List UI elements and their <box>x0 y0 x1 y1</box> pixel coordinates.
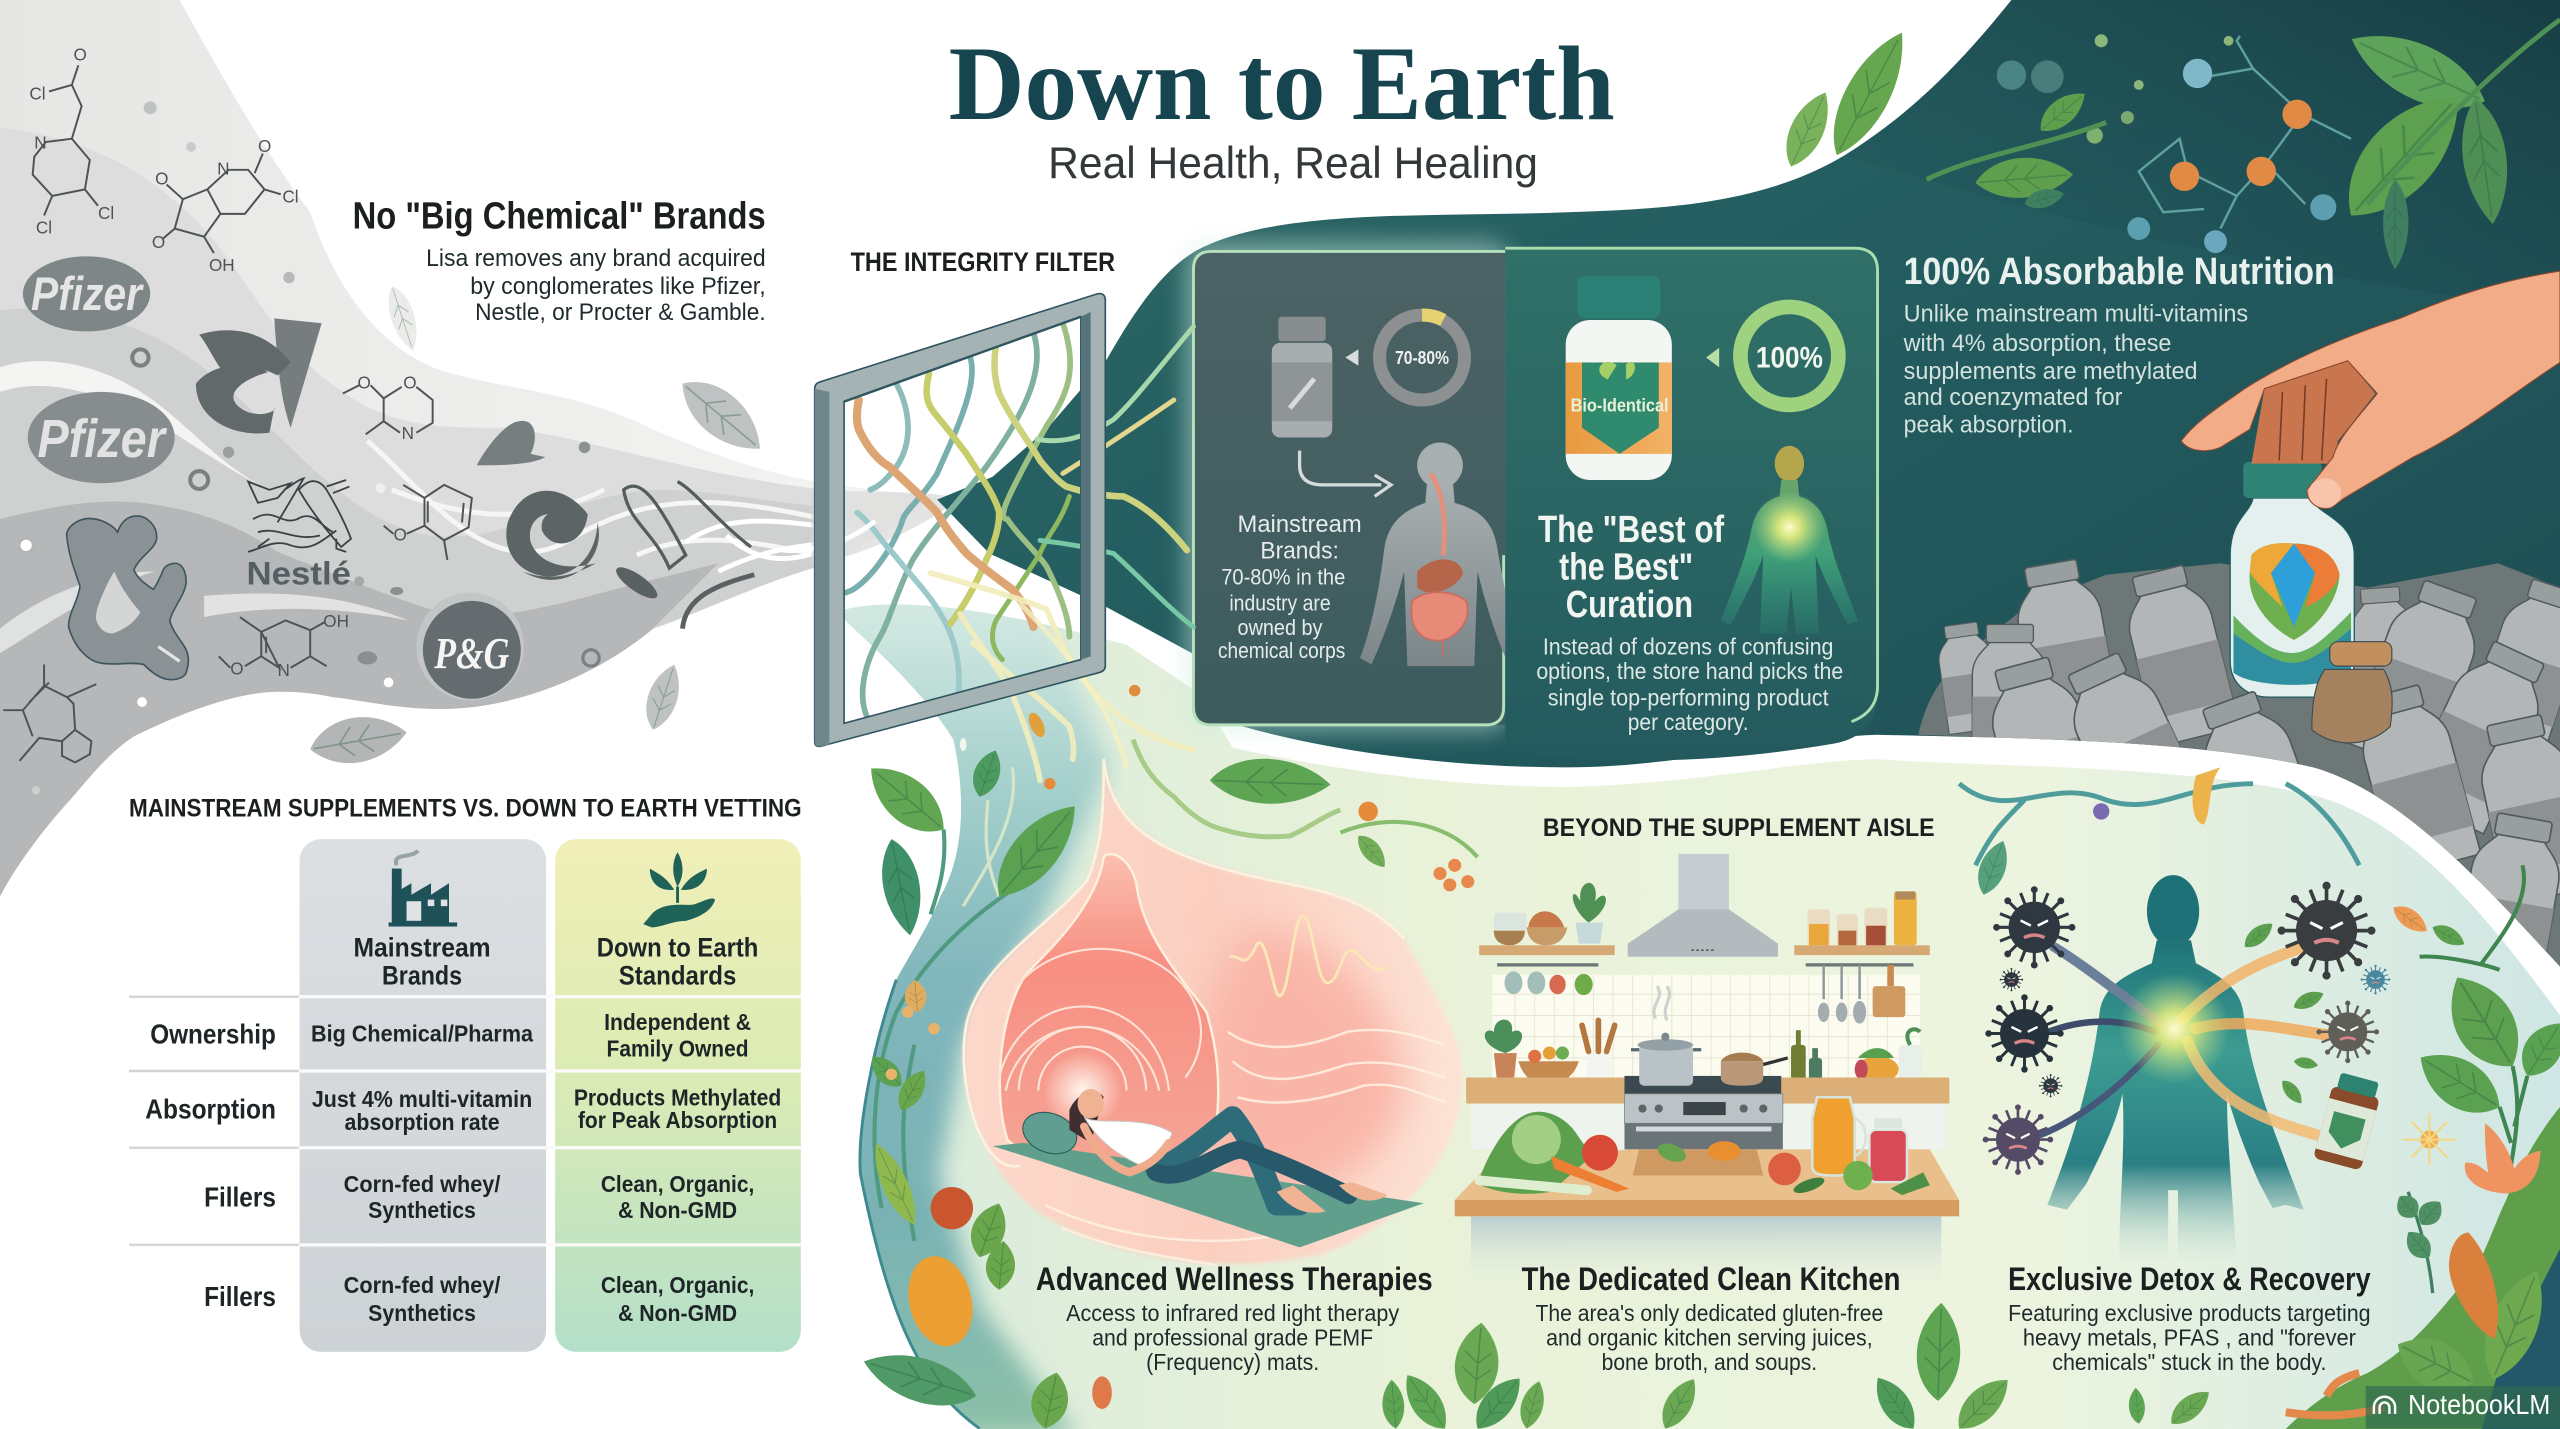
text block: exclusive detox and recovery: Exclusive Detox & Recovery <box>2008 1260 2371 1297</box>
table cells: Clean, Organic, <box>601 1171 754 1197</box>
brand logo: Pfizer ellipse top <box>23 256 150 331</box>
table cells: Independent & <box>604 1009 751 1035</box>
column: down to earth <box>555 839 801 1352</box>
strands <box>784 323 1193 780</box>
row labels: Fillers <box>204 1182 276 1213</box>
glow <box>2119 973 2230 1084</box>
text block: 100% absorbable nutrition: supplements are methylated <box>1904 359 2198 385</box>
right shelf <box>1794 891 1930 1024</box>
island counter <box>1455 1097 1959 1290</box>
molecule atom labels: N <box>217 159 230 179</box>
decorative molecule on dark <box>1997 34 2351 253</box>
frame <box>815 294 1105 746</box>
left shelf <box>1479 883 1615 995</box>
table title: MAINSTREAM SUPPLEMENTS VS. DOWN TO EARTH VETTING <box>129 794 802 822</box>
text block: 100% absorbable nutrition: and coenzymated for <box>1904 385 2123 411</box>
heading: beyond the supplement aisle: BEYOND THE SUPPLEMENT AISLE <box>1543 814 1935 842</box>
table cells: Corn-fed whey/ <box>344 1272 501 1298</box>
molecule atom labels: OH <box>323 611 349 631</box>
text block: advanced wellness therapies <box>1036 1260 1433 1375</box>
row labels: Ownership <box>150 1018 276 1049</box>
subtitle: Real Health, Real Healing <box>1048 139 1538 188</box>
text: mainstream brands note: industry are <box>1229 591 1331 616</box>
text: mainstream brands note: owned by <box>1238 615 1322 640</box>
text: curation note: per category. <box>1628 709 1749 735</box>
icon: bio-identical bottle <box>1566 276 1672 480</box>
text block: no big chemical brands: No "Big Chemical" Brands <box>353 195 766 237</box>
header text: Standards <box>619 960 736 990</box>
text block: exclusive detox and recovery: heavy metals, PFAS , and "forever <box>2023 1324 2356 1350</box>
row labels <box>145 1018 276 1312</box>
text: curation note: options, the store hand picks the <box>1536 658 1843 684</box>
silhouette <box>2047 875 2304 1260</box>
text: mainstream brands note: Mainstream <box>1238 512 1362 538</box>
table cells: & Non-GMD <box>618 1300 737 1326</box>
molecule atom labels: N <box>34 133 47 153</box>
tiled wall <box>1492 975 1920 1079</box>
text block: no big chemical brands: Lisa removes any brand acquired <box>426 246 766 272</box>
table cells: absorption rate <box>344 1109 500 1135</box>
molecule atom labels: Cl <box>282 186 299 206</box>
table cells: Products Methylated <box>574 1084 781 1110</box>
woman on mat <box>993 1089 1424 1247</box>
heading: best of the best: The "Best of <box>1538 508 1724 550</box>
hand picking the bottle <box>2181 271 2560 508</box>
header text <box>353 933 758 990</box>
panel: mainstream brands <box>1193 251 1522 725</box>
pots <box>1631 986 1788 1086</box>
dark teal top right region <box>937 0 2560 967</box>
molecule atom labels: N <box>278 660 290 680</box>
text block: 100% absorbable nutrition: 100% Absorbable Nutrition <box>1904 250 2335 292</box>
column: mainstream <box>300 839 546 1352</box>
counter and stove <box>1466 1076 1949 1149</box>
leaves top right <box>1776 16 2560 269</box>
small leaves <box>2240 917 2326 1107</box>
row labels: Absorption <box>145 1093 276 1124</box>
molecule atom labels: N <box>402 423 414 443</box>
molecule atom labels: O <box>358 373 371 393</box>
brand logo: Pfizer ellipse top: Pfizer <box>31 268 144 321</box>
text block: 100% absorbable nutrition: peak absorption. <box>1904 413 2073 439</box>
back counter plants and utensils <box>1485 1020 1922 1086</box>
text block: no big chemical brands: Nestle, or Procter & Gamble. <box>475 300 766 326</box>
table cells: Synthetics <box>368 1197 476 1223</box>
text block: dedicated clean kitchen: bone broth, and soups. <box>1602 1349 1817 1375</box>
filter frame with strands <box>784 294 1193 780</box>
row labels: Fillers <box>204 1281 276 1312</box>
foreground rubble bottle <box>2202 691 2300 764</box>
icon: grey bottle <box>1272 317 1332 438</box>
brand logo: abstract arrow <box>196 318 322 434</box>
table cells: for Peak Absorption <box>578 1107 777 1133</box>
table cells: Corn-fed whey/ <box>344 1171 501 1197</box>
panel: best of the best <box>1505 248 1878 760</box>
icon: factory <box>389 851 457 927</box>
text block: exclusive detox and recovery: Featuring exclusive products targeting <box>2008 1300 2371 1326</box>
text block: dedicated clean kitchen <box>1522 1260 1900 1375</box>
header text: Brands <box>382 960 462 990</box>
icon: wave signal <box>1229 916 1388 996</box>
row dividers <box>299 997 802 1245</box>
comparison table <box>129 794 802 1352</box>
molecule atom labels: Cl <box>98 203 114 223</box>
NotebookLM watermark <box>2366 1386 2560 1429</box>
table cells: Big Chemical/Pharma <box>311 1021 533 1047</box>
icon: glowing green body <box>1721 446 1858 633</box>
grey chemical flow background <box>0 0 963 896</box>
molecule atom labels: OH <box>209 255 235 275</box>
right foliage <box>2286 865 2560 1429</box>
viruses <box>1983 882 2390 1175</box>
brand logo: Nestle nest and wordmark: Nestlé <box>247 554 351 591</box>
molecule atom labels: Cl <box>29 84 46 104</box>
heading: best of the best: the Best" <box>1559 546 1693 588</box>
header text: Mainstream <box>353 933 491 963</box>
detox side vines <box>1959 767 2359 899</box>
text block: advanced wellness therapies: (Frequency) mats. <box>1146 1349 1319 1375</box>
molecule atom labels: O <box>73 44 87 64</box>
text block: 100% absorbable nutrition <box>1903 250 2335 439</box>
text: curation note: single top-performing product <box>1548 684 1829 710</box>
text block: 100% absorbable nutrition: Unlike mainstream multi-vitamins <box>1904 302 2248 328</box>
brand logo: Nestle nest and wordmark <box>247 478 351 591</box>
icon: bio-identical bottle: Bio-Identical <box>1571 394 1669 415</box>
molecule atom labels: O <box>258 136 271 156</box>
teardrop inner glow <box>1000 854 1218 1168</box>
text block: 100% absorbable nutrition: with 4% absorption, these <box>1903 331 2171 357</box>
molecule atom labels <box>29 44 417 680</box>
molecule atom labels: O <box>155 168 168 188</box>
illustration: detox body <box>1983 875 2390 1260</box>
table cells: Just 4% multi-vitamin <box>312 1086 532 1112</box>
icon: hand with plant <box>643 852 715 927</box>
text block: dedicated clean kitchen: The area's only dedicated gluten-free <box>1536 1300 1883 1326</box>
toxin streams <box>2041 944 2331 1136</box>
brand logo: swirl <box>506 491 599 580</box>
vine and leaves around therapy area <box>1044 740 1478 891</box>
text block: advanced wellness therapies: Access to infrared red light therapy <box>1066 1300 1400 1326</box>
molecule atom labels: O <box>152 232 165 252</box>
brand logo: Pfizer ellipse lower: Pfizer <box>38 409 168 469</box>
heading: the integrity filter: THE INTEGRITY FILTER <box>851 247 1115 277</box>
small supplement bottle <box>2313 1071 2384 1171</box>
rubble of discarded grey bottles <box>1918 556 2560 1002</box>
grey fragments and dots <box>20 101 754 794</box>
range hood <box>1628 854 1778 957</box>
illustration: clean kitchen <box>1455 854 1959 1290</box>
icon: 100 percent ring: 100% <box>1756 341 1823 374</box>
table cells: & Non-GMD <box>618 1197 737 1223</box>
pale green lower panel <box>784 571 2560 1429</box>
text: mainstream brands note: 70-80% in the <box>1221 564 1345 589</box>
text: mainstream brands note: Brands: <box>1260 538 1339 564</box>
icon: 70-80 percent ring <box>1345 315 1464 400</box>
brand logo: grey blob <box>67 516 188 680</box>
brand logo: P&G circle: P&G <box>433 629 510 678</box>
icon: 70-80 percent ring: 70-80% <box>1395 347 1449 368</box>
text: mainstream brands note: chemical corps <box>1218 638 1345 663</box>
title: Down to Earth <box>949 24 1615 142</box>
text block: dedicated clean kitchen: and organic kitchen serving juices, <box>1546 1324 1873 1350</box>
molecule atom labels: O <box>393 524 407 544</box>
text: curation note: Instead of dozens of confusing <box>1543 634 1833 660</box>
table cells: Family Owned <box>607 1035 749 1061</box>
molecule atom labels: O <box>403 373 417 393</box>
molecule diagrams grey <box>3 65 472 762</box>
pink light therapy field <box>964 759 1463 1265</box>
icon: digestive body <box>1360 442 1522 666</box>
text block: advanced wellness therapies: and professional grade PEMF <box>1092 1324 1373 1350</box>
text: curation note <box>1536 634 1843 735</box>
icon: 100 percent ring <box>1706 307 1838 405</box>
text block: no big chemical brands <box>353 195 766 326</box>
text block: exclusive detox and recovery <box>2008 1260 2371 1375</box>
header text: Down to Earth <box>597 933 758 963</box>
brand logo: Pfizer ellipse lower <box>28 392 175 483</box>
text block: advanced wellness therapies: Advanced Wellness Therapies <box>1036 1260 1433 1297</box>
integrity filter glass panel <box>1185 242 1878 760</box>
text block: dedicated clean kitchen: The Dedicated Clean Kitchen <box>1522 1260 1900 1297</box>
loose grey leaves <box>306 282 775 770</box>
bottom foliage <box>1380 1302 2216 1429</box>
molecule atom labels: O <box>230 658 244 678</box>
brand logo: P&G circle <box>416 593 524 700</box>
table cells: Synthetics <box>368 1300 476 1326</box>
table cells <box>311 1009 781 1326</box>
text: mainstream brands note <box>1218 512 1362 663</box>
text block: no big chemical brands: by conglomerates like Pfizer, <box>470 274 766 300</box>
heading: best of the best: Curation <box>1566 583 1693 625</box>
molecule atom labels: Cl <box>36 217 52 237</box>
left foliage <box>856 746 1112 1429</box>
table cells: Clean, Organic, <box>601 1272 754 1298</box>
hero bottle with logo <box>2230 462 2354 697</box>
text block: exclusive detox and recovery: chemicals" stuck in the body. <box>2052 1349 2327 1375</box>
arrow to body <box>1300 451 1391 496</box>
heading: best of the best <box>1538 508 1724 625</box>
small brown jar <box>2312 642 2392 743</box>
